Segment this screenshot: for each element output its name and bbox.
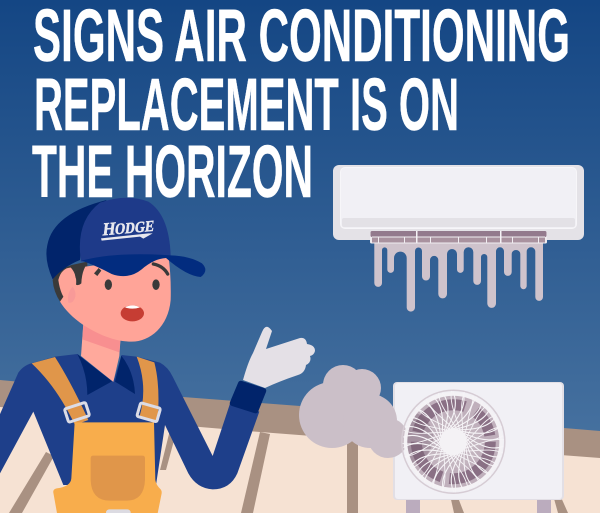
cap brim <box>82 254 205 277</box>
cap <box>46 198 205 279</box>
outdoor condenser unit <box>393 382 564 500</box>
neck shadow <box>82 325 120 352</box>
eyebrow <box>153 264 168 274</box>
cap front panel <box>80 198 171 263</box>
logo: HODGE <box>102 215 155 239</box>
bib pocket <box>91 456 145 501</box>
hair back <box>53 262 87 303</box>
title: THE HORIZON <box>32 130 313 213</box>
unit body <box>333 165 584 240</box>
overall bib <box>53 422 162 513</box>
face <box>60 255 171 342</box>
sideburn and fringe <box>71 262 101 285</box>
strap buckles <box>64 402 161 422</box>
eyes <box>105 279 160 290</box>
gloved hand <box>243 327 315 388</box>
neck <box>81 323 121 382</box>
bib button <box>106 509 131 513</box>
outdoor unit legs <box>406 500 551 513</box>
indoor air conditioner <box>333 165 584 312</box>
ear <box>58 267 76 303</box>
air vent <box>370 231 547 244</box>
fan <box>401 390 506 494</box>
shirt collar <box>77 354 135 395</box>
cap back panel <box>46 200 107 279</box>
mouth <box>121 305 144 321</box>
dripping leak <box>374 240 543 312</box>
overall straps <box>32 357 158 425</box>
technician <box>0 198 259 513</box>
shirt and arms <box>0 354 259 489</box>
roof <box>0 380 600 513</box>
title <box>32 0 570 213</box>
smoke cloud <box>299 365 408 458</box>
sleeve cuff <box>230 381 266 413</box>
